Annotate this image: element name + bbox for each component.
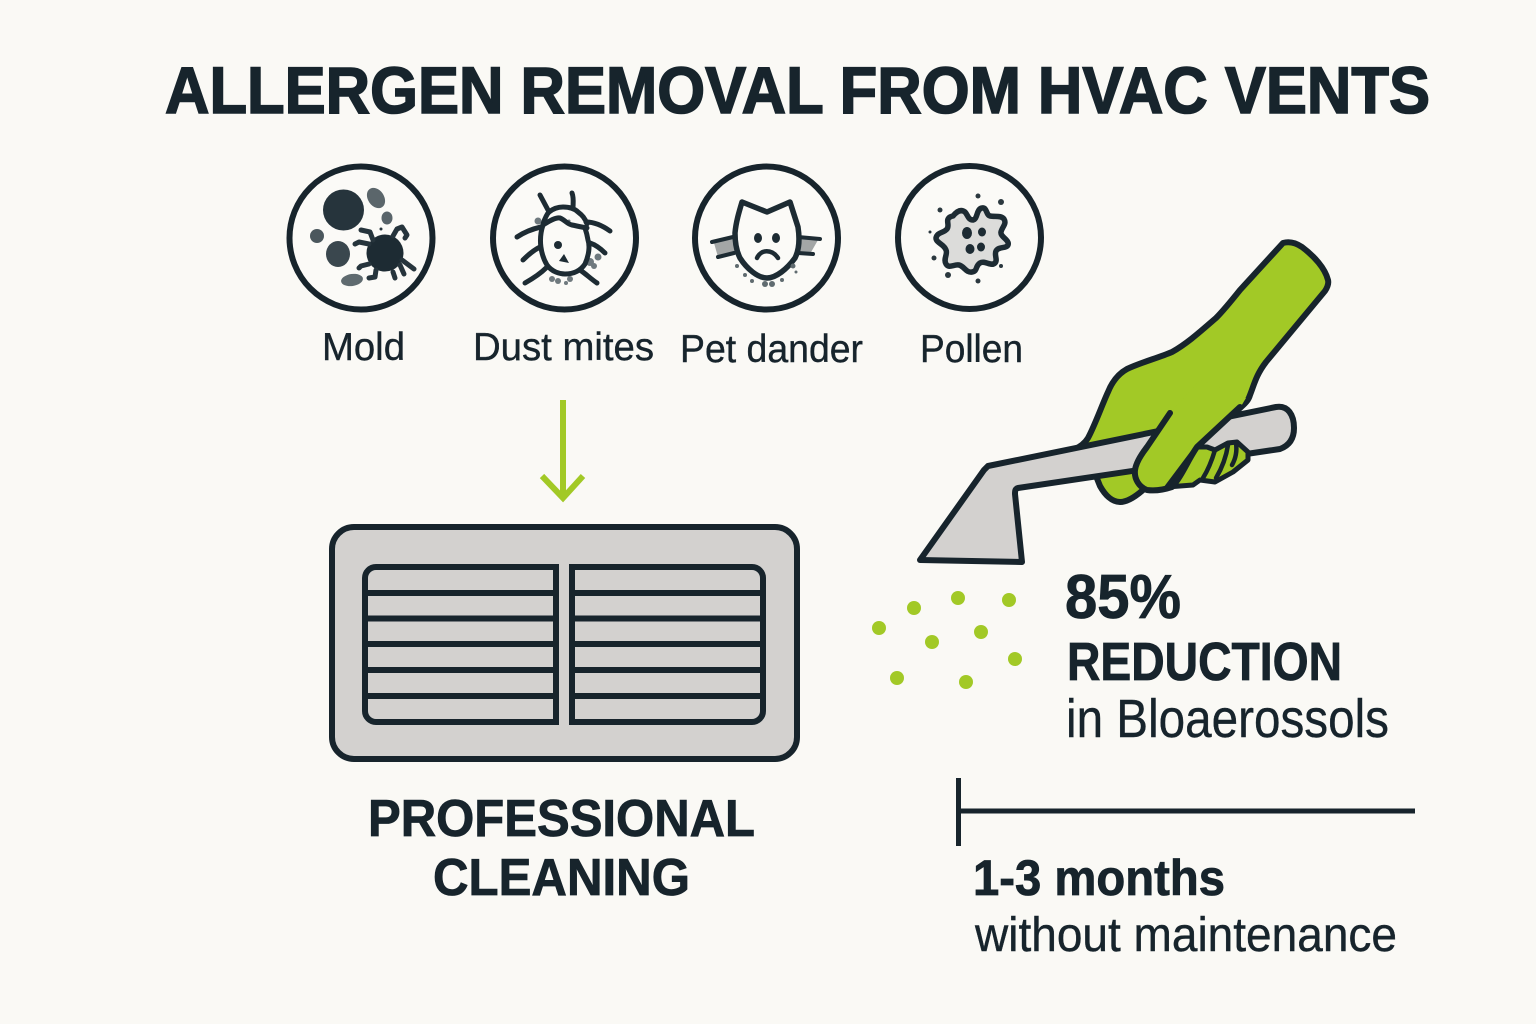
finger creases (1203, 443, 1236, 478)
label: pollen: Pollen (920, 328, 1023, 371)
icon: pet dander (695, 166, 838, 310)
stat: 85% reduction: 85% (1065, 563, 1181, 632)
icon: air vent (332, 527, 797, 759)
icon: pollen (898, 166, 1041, 309)
stat: timeframe: 1-3 months (973, 850, 1225, 906)
heading: professional cleaning: PROFESSIONAL (368, 790, 755, 848)
title: ALLERGEN REMOVAL FROM HVAC VENTS (165, 53, 1430, 127)
panel: allergen icons (290, 166, 1041, 310)
heading: professional cleaning (368, 790, 755, 907)
stat: timeframe (973, 850, 1397, 962)
thumb outline (1135, 407, 1240, 490)
label: pet dander: Pet dander (680, 328, 863, 371)
icon: mold (290, 166, 432, 310)
stat: 85% reduction (1065, 563, 1389, 749)
heading: professional cleaning: CLEANING (433, 849, 690, 907)
icon: dust mite (493, 166, 636, 310)
tool (920, 407, 1294, 562)
label: dust mites: Dust mites (473, 326, 654, 369)
stat: 85% reduction: REDUCTION (1067, 632, 1342, 692)
stat: timeframe: without maintenance (974, 909, 1397, 962)
glove (1073, 242, 1328, 502)
stat: 85% reduction: in Bloaerossols (1066, 689, 1389, 749)
label: mold: Mold (322, 326, 405, 369)
timeline marker (958, 778, 1415, 846)
thumb and palm over handle (1135, 380, 1246, 490)
illustration: gloved hand with vacuum tool (920, 242, 1328, 562)
arrow: down to vent (542, 400, 583, 498)
particles: green dust (872, 591, 1022, 689)
fingers (1167, 442, 1248, 487)
